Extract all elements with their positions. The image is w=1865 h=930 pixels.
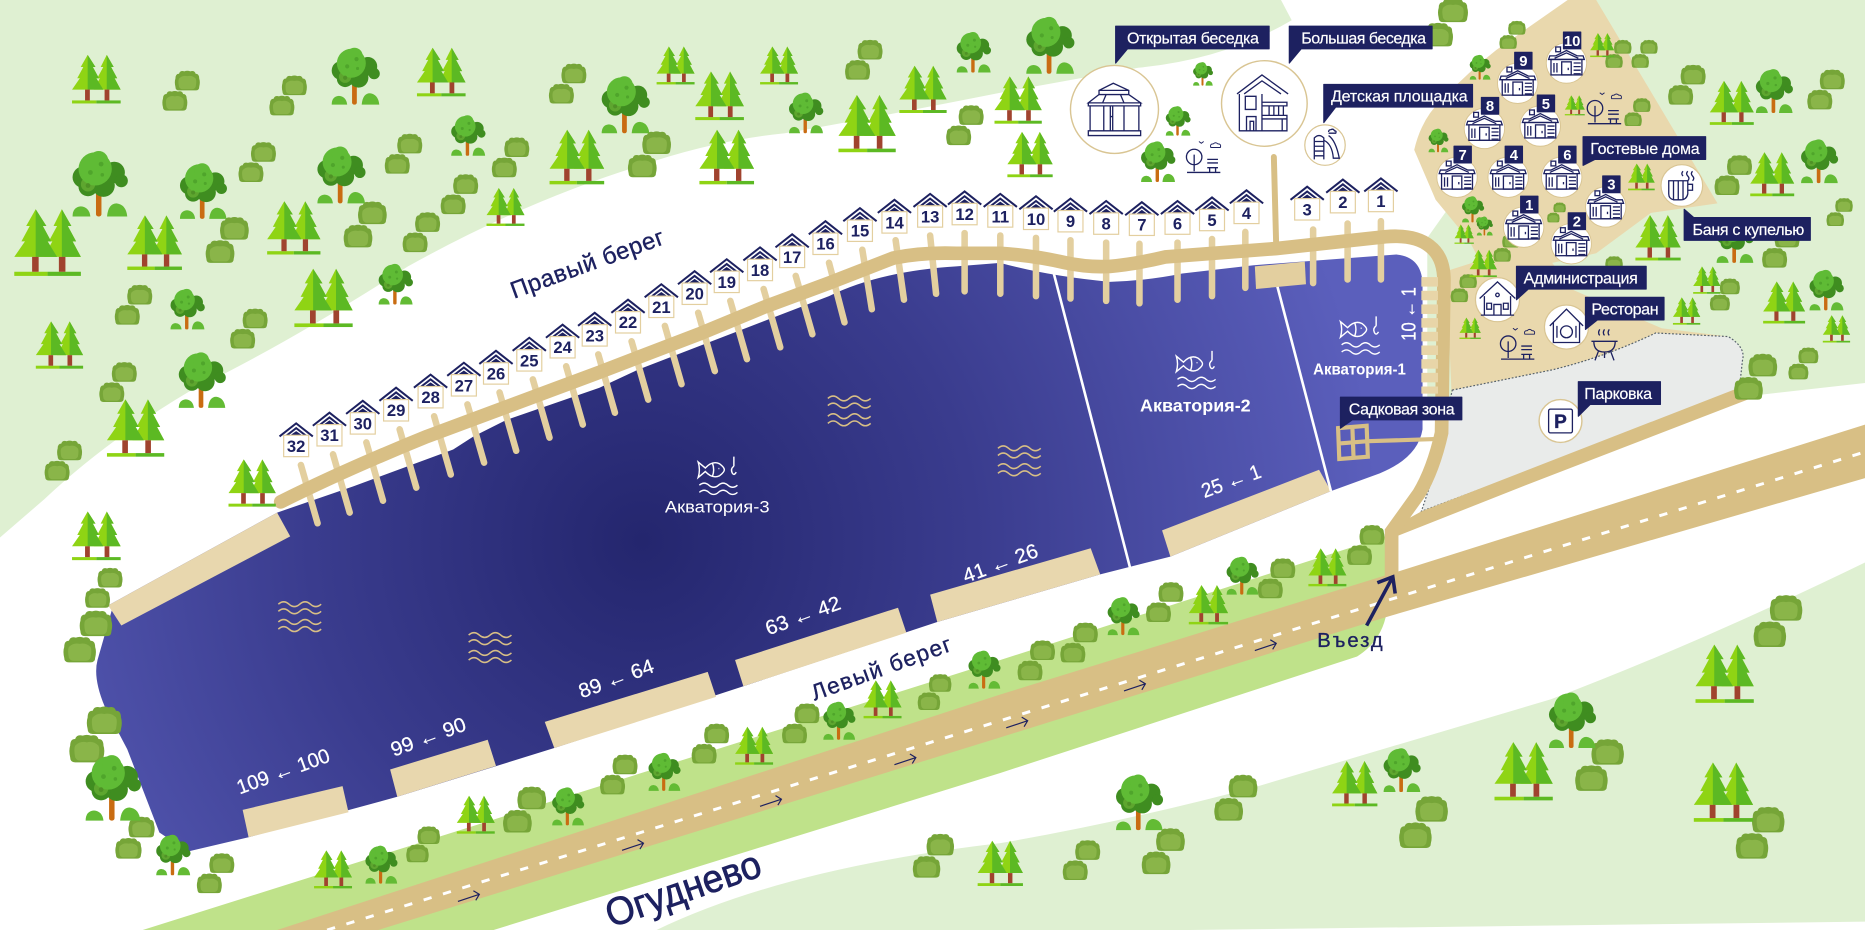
left bank label: Левый берег: [808, 631, 955, 705]
icon: park bench near gazebo: [1186, 142, 1221, 172]
roadside green band: [143, 536, 1386, 930]
callout: big gazebo: [1289, 26, 1432, 63]
slip ranges: 10 ← 1: [1398, 287, 1420, 341]
slip ranges: [234, 287, 1420, 799]
guest houses sand area: [1414, 0, 1728, 410]
numbered fishing houses: 13: [921, 207, 939, 226]
icon: parking: [1539, 400, 1582, 442]
callout: administration: [1517, 266, 1646, 300]
icon: open gazebo: [1070, 65, 1158, 153]
numbered fishing houses: 3: [1303, 200, 1312, 219]
numbered fishing houses: 21: [652, 298, 671, 317]
icon: administration: [1475, 278, 1519, 322]
numbered fishing houses: 1: [1376, 192, 1386, 211]
slip ranges: 109 ← 100: [234, 745, 333, 799]
callout: parking: Парковка: [1584, 385, 1652, 403]
numbered fishing houses: 25: [520, 351, 539, 370]
slip ranges: 89 ← 64: [576, 656, 657, 703]
numbered fishing houses: 18: [751, 261, 769, 280]
callout: parking: [1578, 382, 1660, 416]
slip ranges: 99 ← 90: [388, 714, 469, 761]
numbered fishing houses: 6: [1173, 215, 1182, 234]
callout: cage zone: Садковая зона: [1349, 400, 1455, 418]
numbered fishing houses: 22: [619, 313, 637, 332]
numbered fishing houses: 28: [421, 388, 440, 407]
callout: playground: [1324, 84, 1472, 122]
guest cottages: [1437, 32, 1626, 264]
guest cottages: 3: [1607, 178, 1615, 194]
ladder of ten slips: [1421, 277, 1438, 394]
guest cottages: 7: [1459, 148, 1467, 164]
numbered fishing houses: 16: [816, 235, 835, 254]
entrance arrow: [1367, 577, 1395, 626]
numbered fishing houses: 19: [717, 273, 736, 292]
numbered fishing houses: 26: [487, 364, 505, 383]
road centre dashes: [327, 452, 1865, 930]
numbered fishing houses: 14: [885, 213, 904, 232]
lake: [96, 255, 1423, 852]
numbered fishing houses: 12: [955, 205, 974, 224]
icon: bath with tub: [1661, 165, 1703, 206]
icon: parking: P: [1554, 412, 1567, 433]
guest cottages: 2: [1573, 215, 1581, 231]
zone 1 label: Акватория-1: [1313, 362, 1406, 379]
numbered fishing houses: 8: [1102, 215, 1111, 234]
numbered fishing houses: 4: [1242, 204, 1252, 223]
numbered fishing houses: 9: [1066, 212, 1075, 231]
icon: big gazebo house: [1222, 61, 1307, 146]
callout: bath: Баня с купелью: [1693, 221, 1804, 239]
numbered fishing houses: 15: [851, 222, 869, 241]
callout: bath: [1684, 209, 1810, 240]
numbered fishing houses: 23: [585, 326, 604, 345]
water wave marks: [278, 396, 1041, 662]
numbered fishing houses: 2: [1338, 193, 1347, 212]
right meadow: [1427, 0, 1865, 410]
numbered fishing houses: 32: [287, 437, 305, 456]
pier fingers: [301, 221, 1381, 523]
connector to gazebo: [1274, 157, 1276, 247]
numbered fishing houses: 10: [1027, 210, 1045, 229]
callout: big gazebo: Большая беседка: [1301, 29, 1426, 47]
zone 2 label: Акватория-2: [1140, 395, 1251, 415]
icon: restaurant: [1544, 305, 1588, 349]
numbered fishing houses: [280, 178, 1398, 457]
numbered fishing houses: 31: [320, 426, 339, 445]
guest cottages: 8: [1486, 99, 1494, 115]
callout: guest houses: [1583, 137, 1706, 165]
right bank label: Правый берег: [507, 224, 668, 304]
slip ranges: 41 ← 26: [960, 540, 1041, 588]
parking access road: [1389, 388, 1751, 536]
wide pier platform: [1255, 262, 1306, 289]
callout: playground: Детская площадка: [1331, 88, 1468, 106]
guest cottages: 9: [1519, 54, 1527, 70]
zone 3 label: Акватория-3: [665, 498, 770, 517]
zone 2 label: [1140, 351, 1251, 415]
icon: barbecue grill: [1591, 329, 1618, 360]
slip ranges: 63 ← 42: [763, 593, 844, 640]
numbered fishing houses: 7: [1137, 216, 1146, 235]
top-left meadow: [0, 0, 1292, 538]
guest cottages: 6: [1563, 148, 1571, 164]
callout: open gazebo: Открытая беседка: [1127, 29, 1259, 47]
callout: open gazebo: [1116, 26, 1269, 63]
numbered fishing houses: 17: [783, 248, 801, 267]
numbered fishing houses: 27: [455, 376, 473, 395]
guest cottages: 4: [1510, 148, 1519, 164]
road direction arrows: [458, 640, 1276, 901]
callout: restaurant: [1585, 297, 1664, 329]
numbered fishing houses: 24: [553, 338, 573, 357]
zone dividers: [1054, 274, 1331, 567]
zone 3 label: [665, 457, 770, 517]
numbered fishing houses: 5: [1207, 211, 1217, 230]
icon: park bench near restaurant: [1500, 328, 1535, 359]
numbered fishing houses: 30: [354, 414, 372, 433]
callout: administration: Администрация: [1524, 270, 1638, 288]
callout: cage zone: [1340, 397, 1462, 428]
callout: restaurant: Ресторан: [1591, 301, 1659, 319]
numbered fishing houses: 29: [387, 401, 405, 420]
guest cottages: 5: [1542, 97, 1550, 113]
zone 1 label: [1313, 316, 1406, 379]
numbered fishing houses: 11: [991, 207, 1009, 226]
entrance label: Въезд: [1317, 630, 1383, 652]
icon: playground slide: [1305, 125, 1345, 165]
bottom-right meadow: [657, 563, 1865, 930]
numbered fishing houses: 20: [685, 285, 704, 304]
icon: park bench near cottages: [1587, 93, 1621, 124]
parking area: [1421, 333, 1743, 511]
main walkway: [281, 236, 1444, 583]
callout: guest houses: Гостевые дома: [1590, 140, 1700, 158]
guest cottages: 1: [1525, 198, 1533, 214]
shore strips: [108, 470, 1331, 837]
cage zone: [1338, 426, 1442, 459]
slip ranges: 25 ← 1: [1199, 461, 1264, 503]
main road: [277, 425, 1865, 930]
guest cottages: 10: [1564, 34, 1580, 50]
